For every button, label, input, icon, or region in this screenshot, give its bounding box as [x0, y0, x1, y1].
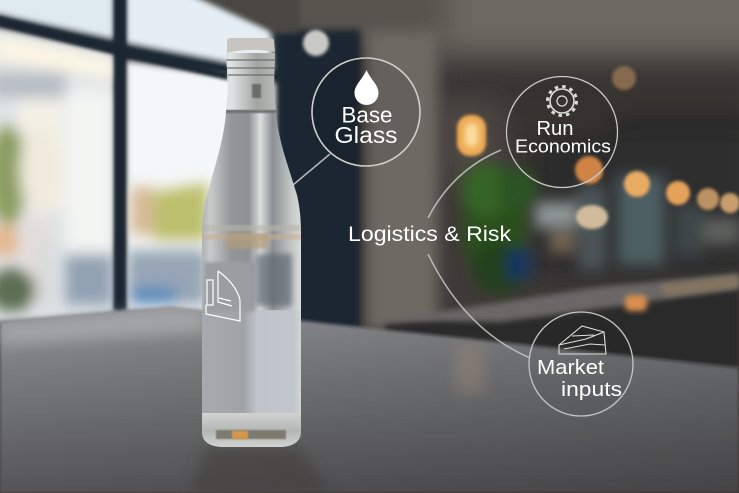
connector: center to Market inputs	[428, 254, 530, 358]
table top	[0, 306, 739, 493]
node: Base Glass	[312, 58, 420, 166]
distant windows	[535, 175, 739, 270]
icon: gear	[548, 86, 576, 116]
ceiling corner	[185, 0, 300, 34]
dark column beside bottle	[274, 30, 360, 330]
label: Market inputs: Market	[537, 357, 604, 379]
center heading: Logistics & Risk: Logistics & Risk	[348, 223, 512, 246]
label: Market inputs: inputs	[561, 379, 622, 401]
label: Base Glass: Base	[342, 102, 392, 128]
label: Base Glass: Glass	[334, 122, 398, 148]
glass bottle	[200, 38, 304, 449]
label: Run Economics: Run	[536, 118, 574, 140]
bottle logo	[206, 271, 240, 321]
node: Market inputs	[529, 312, 633, 416]
window frame	[0, 0, 228, 310]
icon: water drop	[354, 70, 378, 105]
bottle cap	[227, 38, 275, 53]
plant	[461, 164, 538, 294]
node: Run Economics	[506, 76, 618, 188]
counter	[385, 274, 739, 372]
connector: bottle to Base Glass	[293, 154, 330, 185]
connector: center to Run Economics	[428, 150, 501, 218]
bokeh lights	[303, 30, 739, 229]
label: Run Economics: Economics	[515, 136, 611, 156]
icon: paper stack	[559, 326, 606, 354]
windows	[0, 0, 282, 322]
